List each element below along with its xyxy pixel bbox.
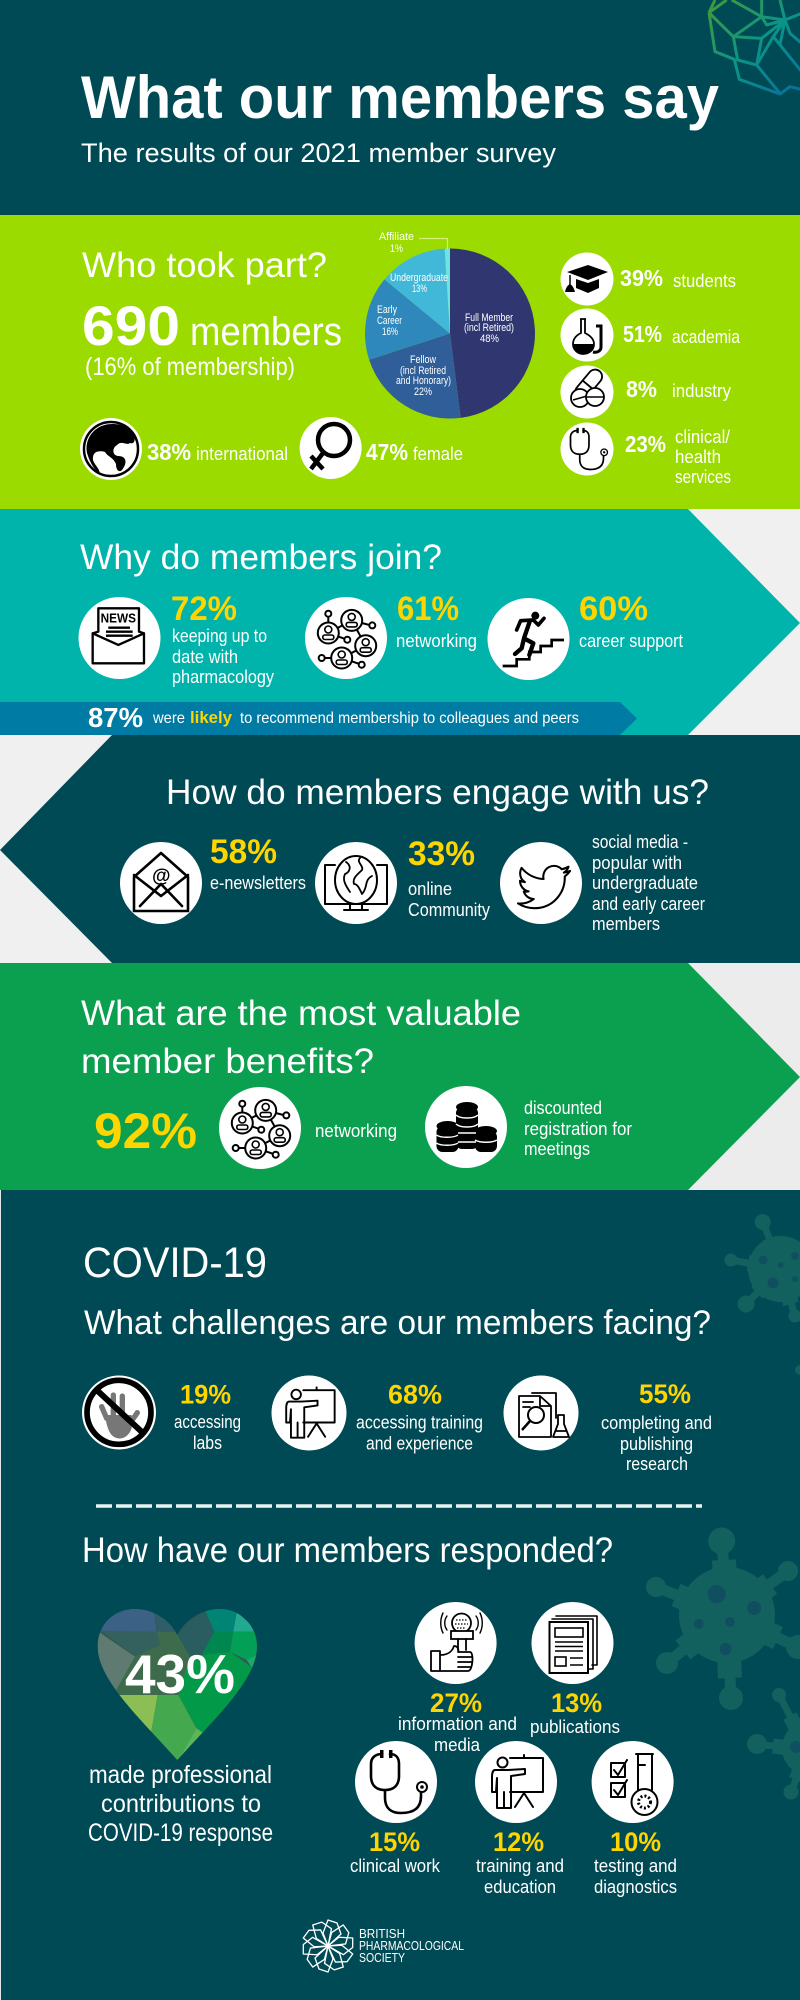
stat: networking [396,590,477,651]
icon: twitter bird [500,842,582,924]
panel: why do members join [0,509,800,735]
icon: coins [425,1086,507,1168]
stat: completing and publishing: 55% [639,1379,691,1409]
stat: keeping up to date: pharmacology [172,667,274,687]
text: social media: social media - [592,832,688,852]
icon: graduation cap [560,252,614,306]
pie chart: membership grade: Early [377,304,397,316]
logo: British Pharmacological Society: BRITISH [359,1926,405,1941]
stat: online community: Community [408,900,490,920]
subtitle: The results of our 2021 member survey [81,138,556,168]
stat: academia: 51% [623,321,662,347]
heading: why do members join: Why do members join? [80,538,442,577]
stat: clinical work: 15% [369,1827,420,1857]
icon: online globe monitor [315,842,397,924]
decoration: virus, large [646,1528,800,1710]
pie chart: membership grade: Affiliate [379,231,414,243]
stat: keeping up to date: date with [172,647,238,667]
icon: society logo, top right [709,0,800,94]
text: discounted registration: registration for [524,1119,632,1139]
stat: accessing training: and experience [366,1434,473,1454]
icon: globe [80,418,142,480]
stat: completing and publishing [601,1379,712,1474]
stat: training and education: training and [476,1856,564,1876]
text: discounted registration: discounted [524,1098,602,1118]
stat: testing and diagnostics [594,1827,677,1897]
stat: 690 members: (16% of membership) [85,353,295,381]
stat: students [620,265,736,291]
panel: header [0,0,800,215]
stat: e-newsletters [210,833,306,893]
stat: career support: career support [579,631,683,651]
icon: female symbol [300,417,362,479]
stat: female: 47% [366,439,408,465]
pie chart: membership grade: Fellow [410,354,436,366]
stat: information and media: information and [398,1714,517,1734]
stat: keeping up to date: keeping up to [172,626,267,646]
banner: 87% recommend: were [152,710,185,727]
heading: COVID-19: COVID-19 [83,1239,267,1287]
stat: clinical/health services: 23% [625,431,666,457]
text: discounted registration: meetings [524,1139,590,1159]
stat: information and media [398,1688,517,1755]
stat: 690 members [82,294,342,381]
logo: British Pharmacological Society: SOCIETY [359,1950,405,1965]
pie chart: membership grade: 16% [382,326,398,338]
stat: 690 members: 690 [82,294,180,357]
stat: career support: 60% [579,590,648,628]
text: made professional contributions: made professional [89,1761,272,1789]
text: social media: undergraduate [592,873,698,893]
panel: most valuable benefits [0,963,800,1190]
pie chart: membership grade: 48% [480,333,499,345]
icon: research document [504,1376,578,1450]
stat: international: 38% [147,439,191,465]
stat: female: female [413,444,463,464]
stat: completing and publishing: research [626,1454,688,1474]
decoration: virus, small [747,1688,800,1800]
stat: international: international [196,444,288,464]
stat: clinical/health services: health [675,447,721,467]
stat: information and media: 27% [430,1688,482,1718]
stat: keeping up to date [171,590,274,687]
stat: clinical/health services [625,427,731,487]
stat: accessing labs [174,1380,241,1453]
stat: clinical/health services: clinical/ [675,427,730,447]
text: social media: members [592,914,660,934]
text: social media: popular with [592,853,682,873]
stat: training and education [476,1827,564,1897]
stat: publications [530,1688,620,1737]
stat: testing and diagnostics: testing and [594,1856,677,1876]
stat: international [147,439,288,465]
pie chart: membership grade: (incl Retired) [464,322,514,334]
stat: accessing labs: labs [193,1433,222,1453]
pie chart: membership grade: Career [377,315,402,327]
logo: British Pharmacological Society: PHARMACOLOGICAL [359,1938,464,1953]
logo: British Pharmacological Society [299,1917,464,1975]
stat: training and education: education [484,1877,556,1897]
stat: accessing training [356,1380,483,1454]
stat: 690 members: members [190,310,342,354]
stat: accessing training: 68% [388,1380,442,1410]
stat: industry: industry [672,381,731,401]
banner: 87% recommend: 87% [88,702,143,733]
icon: presenter [272,1376,346,1450]
pie chart: membership grade: and Honorary) [396,375,451,387]
stat: online community: 33% [408,835,475,873]
icon: newsletter envelope: NEWS [101,612,136,626]
banner: 87% recommend [0,702,637,735]
title: What our members say [81,64,720,131]
icon: newsletter envelope [78,597,160,679]
stat: testing and diagnostics: diagnostics [594,1877,677,1897]
heading: how have members responded: How have our members responded? [82,1531,613,1570]
stat: industry [626,376,731,402]
stat: clinical/health services: services [675,467,731,487]
stat: online community [408,835,490,920]
stat: networking: networking [396,631,477,651]
text: social media: and early career [592,894,705,914]
icon: pills [560,366,614,418]
pie chart: membership grade: 1% [390,243,403,255]
stat: completing and publishing: publishing [620,1434,693,1454]
pie chart: membership grade: 13% [412,283,427,295]
stat: testing and diagnostics: 10% [610,1827,661,1857]
heading: what challenges: What challenges are our members facing? [84,1304,711,1342]
stat: e-newsletters: e-newsletters [210,873,306,893]
stat: clinical work [350,1827,441,1876]
decoration: virus, top [724,1214,800,1375]
icon: networking [219,1087,301,1169]
stat: industry: 8% [626,376,657,402]
stat: students: 39% [620,265,663,291]
icon: stethoscope [355,1741,437,1823]
heading: most valuable benefits: What are the most valuable [81,994,521,1033]
icon: test tube and checklist [592,1741,674,1823]
pie chart: membership grade: Undergraduate [390,272,448,284]
icon: runner on stairs [488,598,570,680]
stat: networking: 61% [397,590,459,628]
stat: training and education: 12% [493,1827,544,1857]
icon: no-entry hand [82,1376,156,1450]
pie chart: membership grade: Full Member [465,312,513,324]
pie chart: membership grade: 22% [414,386,432,398]
stat: publications: publications [530,1717,620,1737]
stat: completing and publishing: completing and [601,1413,712,1433]
panel: COVID-19 [0,1190,800,2000]
icon: faceted heart with 43% [98,1609,257,1760]
text: made professional contributions [88,1761,273,1847]
stat: accessing training: accessing training [356,1412,483,1432]
pie chart: membership grade [365,231,535,418]
text: discounted registration [524,1098,632,1159]
banner: 87% recommend: to recommend membership to colleagues and peers [240,710,579,727]
stat: female [366,439,463,465]
text: social media [592,832,705,934]
label: networking: networking [315,1121,397,1141]
stat: students: students [673,271,736,291]
stat: accessing labs: accessing [174,1412,241,1432]
text: made professional contributions: COVID-19 response [88,1819,273,1847]
icon: presenter [475,1741,557,1823]
stat: accessing labs: 19% [180,1380,231,1410]
stat: keeping up to date: 72% [171,590,237,628]
stat: academia: academia [672,327,741,347]
stat: online community: online [408,879,452,899]
stat: e-newsletters: 58% [210,833,277,871]
panel: who took part [0,215,800,509]
heading: most valuable benefits: member benefits? [81,1042,374,1081]
icon: flask and test tube [560,308,614,362]
stat: clinical work: clinical work [350,1856,441,1876]
stat: 92%: 92% [94,1103,197,1159]
stat: academia [623,321,741,347]
banner: 87% recommend: likely [190,708,233,727]
stat: publications: 13% [551,1688,602,1718]
icon: publications [532,1602,614,1684]
icon: networking [305,597,387,679]
icon: email envelope [120,842,202,924]
icon: microphone [415,1602,497,1684]
icon: faceted heart with 43%: 43% [125,1643,235,1705]
stat: career support [579,590,683,651]
heading: who took part: Who took part? [82,246,327,285]
heading: how do members engage: How do members engage with us? [166,773,709,812]
icon: email envelope: @ [152,866,171,887]
heading: most valuable benefits [81,994,521,1081]
stat: information and media: media [434,1735,481,1755]
pie chart: membership grade: (incl Retired [400,365,446,377]
panel: how do members engage [0,735,800,963]
text: made professional contributions: contributions to [101,1790,261,1818]
icon: stethoscope [560,422,614,476]
